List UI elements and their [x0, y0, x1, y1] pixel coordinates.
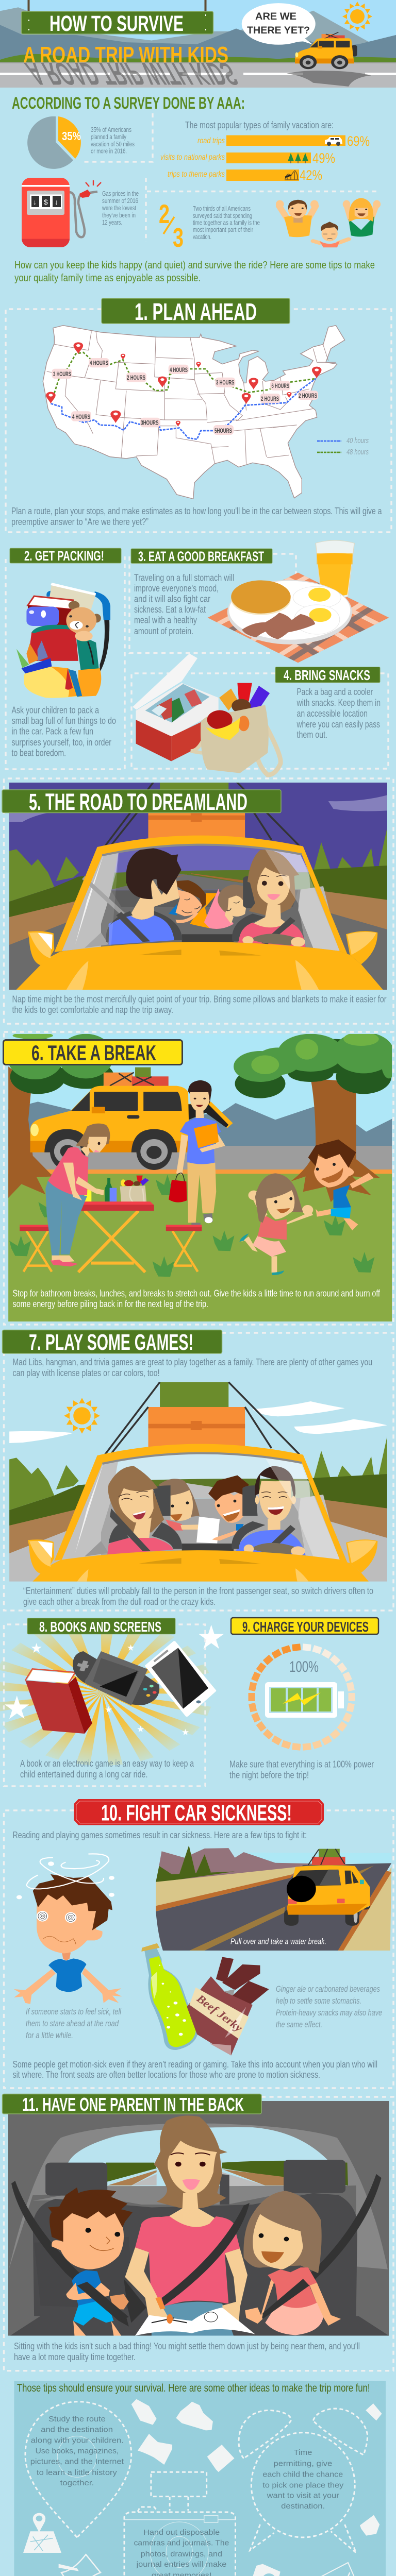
gauge percentage: 100%: [289, 1658, 319, 1675]
text: books and screens: A book or an electronic game is an easy way to keep a: [20, 1758, 194, 1769]
speech bubble: [242, 3, 316, 45]
icon: gas pump: [22, 178, 101, 247]
text: get packing: Ask your children to pack a: [11, 705, 100, 716]
illustration: backpack: [16, 583, 110, 698]
text: question: [14, 260, 375, 284]
sign: 3. eat a good breakfast: [131, 549, 272, 564]
route time labels: 2 HOURS: [261, 396, 279, 402]
people: sleeping kids: [169, 880, 246, 929]
sign: 8. books and screens: [27, 1618, 175, 1635]
panel: other ideas: [14, 2381, 386, 2576]
dashed ribbon loop: [239, 2409, 368, 2553]
text: study the route: Use books, magazines,: [36, 2447, 119, 2455]
text: two thirds: [193, 205, 260, 241]
text: take a break: some energy before piling back in for the next leg of the trip.: [12, 1299, 208, 1309]
text: entertainment duties: [23, 1586, 373, 1607]
stars: ★: [105, 1705, 112, 1715]
sign: 10. fight car sickness: [74, 1799, 324, 1826]
person: mother in passenger seat: [107, 1466, 183, 1554]
scene: family laughing: [9, 1382, 387, 1599]
text: gas prices: [102, 190, 139, 226]
panel: 5. the road to dreamland: [2, 774, 393, 1024]
car with open hatch: [30, 1067, 233, 1170]
sign: 6. take a break: 6. TAKE A BREAK: [31, 1041, 156, 1065]
text: games intro: [12, 1357, 372, 1378]
text: study the route: [30, 2415, 124, 2487]
text: study the route: and the destination: [41, 2426, 113, 2434]
bar chart: vacation types: 42%: [300, 167, 322, 183]
sign: 7. play some games: 7. PLAY SOME GAMES!: [29, 1330, 193, 1355]
route: blue 40 hours: [51, 379, 316, 439]
text: time permitting: [262, 2448, 344, 2511]
heading: popular vacations: The most popular types of family vacation are:: [185, 120, 334, 130]
title sign: how to survive: HOW TO SURVIVE: [50, 11, 184, 36]
sign: 11. have one parent in the back: 11. HAVE ONE PARENT IN THE BACK: [22, 2094, 244, 2115]
text: two thirds: vacation.: [193, 233, 211, 241]
text: take a break: [12, 1289, 381, 1309]
icon: map with pin: [23, 2513, 61, 2553]
route time labels: 2 HOURS: [127, 375, 145, 381]
illustration: dizzy boy: [14, 1854, 122, 2004]
text: parent in back: [14, 2341, 360, 2362]
text: get packing: to beat boredom.: [11, 748, 66, 758]
dashed monitor and camera: [124, 2472, 235, 2576]
sign: 7. play some games: [2, 1330, 222, 1355]
text: breakfast: and it will also fight car: [134, 594, 210, 604]
map legend: 40 hours: [346, 436, 369, 445]
person: father with folder and bag: [169, 1080, 225, 1231]
text: bring snacks: them out.: [297, 730, 327, 740]
panel: 9. charge your devices: [229, 1618, 378, 1781]
text: breakfast: sickness. Eat a low-fat: [134, 604, 206, 615]
caption: stare ahead: them to stare ahead at the road: [26, 2019, 119, 2028]
text: breakfast: Traveling on a full stomach will: [134, 573, 234, 583]
map legend: [317, 436, 369, 456]
colouring book: [135, 2308, 255, 2336]
icon: museum: [207, 2445, 235, 2472]
tree canopies: [8, 1032, 396, 1098]
route time labels: 3 HOURS: [53, 371, 71, 378]
icon: roller coaster: [285, 171, 299, 180]
text: bring snacks: an accessible location: [297, 708, 368, 719]
text: time permitting: want to visit at your: [267, 2492, 339, 2500]
sign: 3. eat a good breakfast: 3. EAT A GOOD BREAKFAST: [138, 549, 264, 564]
text: plan ahead: [11, 506, 382, 527]
sign: 10. fight car sickness: 10. FIGHT CAR SICKNESS!: [101, 1800, 292, 1826]
text: two thirds: Two thirds of all Americans: [193, 205, 251, 212]
text: books and screens: [20, 1758, 194, 1780]
pie chart: 35%: [27, 116, 81, 169]
text: 35 percent: or more in 2016.: [91, 147, 127, 155]
text: study the route: along with your children.: [31, 2436, 124, 2445]
person: boy jumping: [308, 1140, 374, 1230]
icon: aquarium: [316, 2563, 356, 2576]
person: boy: [48, 2188, 133, 2336]
bar chart: vacation types: trips to theme parks: [168, 170, 225, 179]
icon: suitcase: [366, 2403, 382, 2420]
stars: ★: [127, 1643, 135, 1653]
text: hand out cameras: photos, drawings, and: [141, 2550, 222, 2558]
scene: back seat: [8, 2101, 389, 2336]
icon: yellow car: [295, 32, 357, 69]
speech bubble: ARE WE: [255, 11, 296, 22]
text: 35 percent: [91, 126, 135, 155]
icon: sun: [342, 2, 372, 31]
text: entertainment duties: give each other a break from the dull road or the crazy kids.: [23, 1597, 216, 1607]
stars: ★: [3, 1689, 31, 1726]
text: sickness intro: Reading and playing games sometimes result in car sickness. Here are a few tips to fight it:: [12, 1830, 307, 1840]
seat belts: [11, 2174, 382, 2327]
map pins: [46, 342, 322, 427]
text: bring snacks: Pack a bag and a cooler: [297, 687, 373, 697]
text: time permitting: each child the chance: [262, 2470, 343, 2479]
text: hand out cameras: cameras and journals. The: [134, 2539, 229, 2548]
grass tufts: [9, 1175, 374, 1277]
text: time permitting: to pick one place they: [262, 2481, 344, 2489]
person: father: [106, 848, 183, 945]
text: time permitting: Time: [294, 2448, 312, 2457]
panel: 2. get packing: [6, 548, 125, 769]
route time labels: 3 HOURS: [216, 380, 235, 386]
icon: open book: [138, 2434, 172, 2465]
text: two thirds: most important part of their: [193, 226, 254, 233]
route time labels: 5HOURS: [214, 428, 232, 434]
scene: picnic stop: [8, 1032, 396, 1323]
route time labels: 4 HOURS: [170, 367, 188, 374]
text: bring snacks: [296, 687, 381, 740]
sign: 11. have one parent in the back: [2, 2094, 261, 2115]
illustration: beef jerky: Beef Jerky: [194, 1991, 245, 2035]
person: mother at table: [45, 1124, 110, 1266]
icon: white jeep: [325, 137, 342, 146]
text: study the route: Study the route: [48, 2415, 106, 2424]
stars: ★: [196, 1619, 226, 1657]
map of the US: [43, 326, 345, 499]
text: gas prices: they've been in: [102, 211, 136, 219]
panel: 4. bring snacks: [131, 654, 388, 775]
text: get packing: in the car. Pack a few fun: [11, 726, 93, 737]
route time labels: [52, 358, 318, 435]
caption: ginger ale: the same effect.: [276, 2020, 322, 2029]
illustration: cooler and snack bag: [133, 654, 280, 775]
route: green 48 hours: [54, 352, 316, 393]
panel: 8. books and screens: [0, 1618, 226, 1786]
route time labels: 6 HOURS: [271, 383, 289, 389]
icon: gas pump: $: [44, 198, 48, 206]
text: breakfast: amount of protein.: [134, 626, 193, 636]
stars: ★: [137, 1724, 144, 1735]
caption: stare ahead: [26, 2007, 122, 2040]
text: motion sick: sit where. The front seats are often better locations for those who are prone to motion sickness.: [12, 2070, 320, 2080]
caption: stare ahead: for a little while.: [26, 2030, 73, 2040]
text: charge devices: [229, 1759, 374, 1781]
caption: ginger ale: help to settle some stomachs.: [276, 1996, 361, 2006]
scene: night drive: [9, 774, 387, 991]
bar chart: vacation types: road trips: [197, 137, 225, 145]
stat: two thirds: [159, 199, 184, 253]
text: parent in back: have a lot more quality time together.: [14, 2352, 136, 2362]
sign: 2. get packing: 2. GET PACKING!: [24, 548, 104, 564]
text: get packing: [11, 705, 116, 758]
paper held by kids: [196, 1517, 220, 1544]
icon: pine trees: [288, 153, 308, 163]
icon: car rear view: [284, 1849, 370, 1926]
person: girl in back: [159, 1479, 200, 1531]
stat: two thirds: 2: [159, 199, 170, 229]
sign: 1. plan ahead: 1. PLAN AHEAD: [135, 298, 257, 325]
text: study the route: together.: [60, 2479, 94, 2487]
icon: sun: [64, 1398, 100, 1434]
stars: ★: [182, 1727, 189, 1738]
sign: 6. take a break: [3, 1040, 183, 1065]
bar chart: vacation types: [160, 133, 370, 183]
icon: camera: [250, 2564, 280, 2576]
text: two thirds: time together as a family is the: [193, 218, 260, 227]
icon: gas pump: ↓: [55, 198, 58, 206]
text: time permitting: destination.: [281, 2502, 325, 2511]
text: plan ahead: preemptive answer to “Are we there yet?”: [11, 517, 148, 527]
text: study the route: to learn a little history: [37, 2468, 117, 2477]
text: 35 percent: 35% of Americans: [91, 126, 131, 133]
icon: battery: [265, 1682, 344, 1718]
text: study the route: pictures, and the Internet: [30, 2458, 124, 2466]
text: breakfast: [134, 573, 234, 636]
picnic table and food: [20, 1176, 202, 1272]
text: dreamland: [12, 994, 387, 1015]
title reflection: A ROAD TRIP WITH KIDS: [19, 56, 244, 91]
route time labels: 3HOURS: [141, 420, 159, 427]
panel: 11. have one parent in the back: [2, 2094, 393, 2371]
person: mother in back: [125, 2115, 250, 2336]
route time labels: 4 HOURS: [72, 414, 90, 420]
text: question: your quality family time as enjoyable as possible.: [14, 273, 201, 284]
sign posts: [29, 0, 205, 12]
clouds: [9, 1401, 387, 1443]
illustration: soda bottle: [141, 1943, 198, 2050]
heading: according to a survey: ACCORDING TO A SURVEY DONE BY AAA:: [12, 94, 245, 112]
text: get packing: small bag full of fun things to do: [11, 716, 116, 726]
icon: gas pump: ↓: [33, 198, 37, 206]
sunburst rays: [0, 1619, 213, 1766]
text: get packing: surprises yourself, too, in order: [11, 737, 111, 748]
bar chart: vacation types: 49%: [312, 150, 335, 166]
panel: 6. take a break: [3, 1032, 396, 1325]
speech bubble: THERE YET?: [247, 25, 310, 36]
text: dreamland: the kids to get comfortable and nap the trip away.: [12, 1005, 173, 1015]
person: girl dancing: [239, 1173, 313, 1275]
dashed outlines and icons: [23, 2399, 382, 2576]
car shadow: [287, 71, 371, 87]
text: gas prices: Gas prices in the: [102, 190, 139, 197]
text: 35 percent: vacation of 50 miles: [91, 140, 135, 148]
text: hand out cameras: journal entries will make: [136, 2560, 226, 2569]
person: father driving: [232, 1466, 306, 1556]
illustration: family: [276, 198, 381, 247]
caption: ginger ale: [276, 1984, 382, 2029]
text: gas prices: 12 years.: [102, 218, 122, 226]
icon: closed book: [131, 2399, 157, 2425]
panel: 1. plan ahead: [6, 298, 391, 532]
icon: notebook and pencil: [59, 2554, 101, 2576]
panel: 7. play some games: [2, 1330, 393, 1611]
illustration: breakfast: [207, 540, 396, 663]
dashed location pin: [25, 2402, 131, 2537]
text: games intro: can play with license plates or car colors, too!: [12, 1368, 160, 1378]
title: a road trip with kids: A ROAD TRIP WITH KIDS: [23, 42, 228, 67]
icon: pine trees: [360, 2515, 380, 2536]
illustration: beef jerky: [187, 1957, 269, 2056]
text: breakfast: meal with a healthy: [134, 615, 197, 625]
stars: [3, 1619, 226, 1738]
stat: two thirds: 3: [173, 223, 184, 253]
text: hand out cameras: Hand out disposable: [143, 2528, 220, 2537]
person: mother: [232, 850, 306, 947]
icon: car with luggage: [176, 2402, 213, 2430]
person: boy in back: [208, 1476, 249, 1531]
person: girl: [243, 2191, 341, 2335]
illustration: book, game console and phone: [25, 1642, 214, 1734]
text: two thirds: surveyed said that spending: [193, 212, 252, 219]
text: 35 percent: planned a family: [91, 133, 126, 141]
bar chart: vacation types: 69%: [347, 133, 370, 149]
panel dividers: [84, 113, 380, 242]
route time labels: 4 HOURS: [90, 361, 108, 367]
illustration: highway pull over: [156, 1845, 391, 1951]
sign: 5. the road to dreamland: 5. THE ROAD TO DREAMLAND: [29, 789, 248, 815]
route time labels: 2 HOURS: [299, 393, 317, 399]
illustration: highway pull over: Pull over and take a water break.: [230, 1938, 326, 1946]
caption: stare ahead: If someone starts to feel sick, tell: [26, 2007, 122, 2016]
sign: 5. the road to dreamland: [2, 789, 281, 815]
text: hand out cameras: [134, 2528, 229, 2576]
text: gas prices: were the lowest: [102, 204, 136, 212]
bar chart: vacation types: visits to national parks: [160, 153, 225, 162]
header banner: [0, 0, 396, 91]
sign: 8. books and screens: 8. BOOKS AND SCREENS: [39, 1619, 161, 1635]
battery gauge ring: [249, 1644, 355, 1750]
text: time permitting: permitting, give: [273, 2460, 332, 2468]
text: books and screens: child entertained during a long car ride.: [20, 1769, 147, 1780]
stars: ★: [30, 1641, 42, 1656]
panel: 10. fight car sickness: [4, 1799, 393, 2088]
text: gas prices: summer of 2016: [102, 197, 138, 205]
pie chart: 35%: 35%: [62, 129, 81, 143]
text: charge devices: the night before the trip!: [229, 1770, 309, 1781]
text: motion sick: [12, 2059, 377, 2080]
map legend: 48 hours: [346, 448, 369, 456]
text: breakfast: improve everyone's mood,: [134, 583, 219, 594]
panel: 3. eat a good breakfast: [129, 540, 396, 663]
